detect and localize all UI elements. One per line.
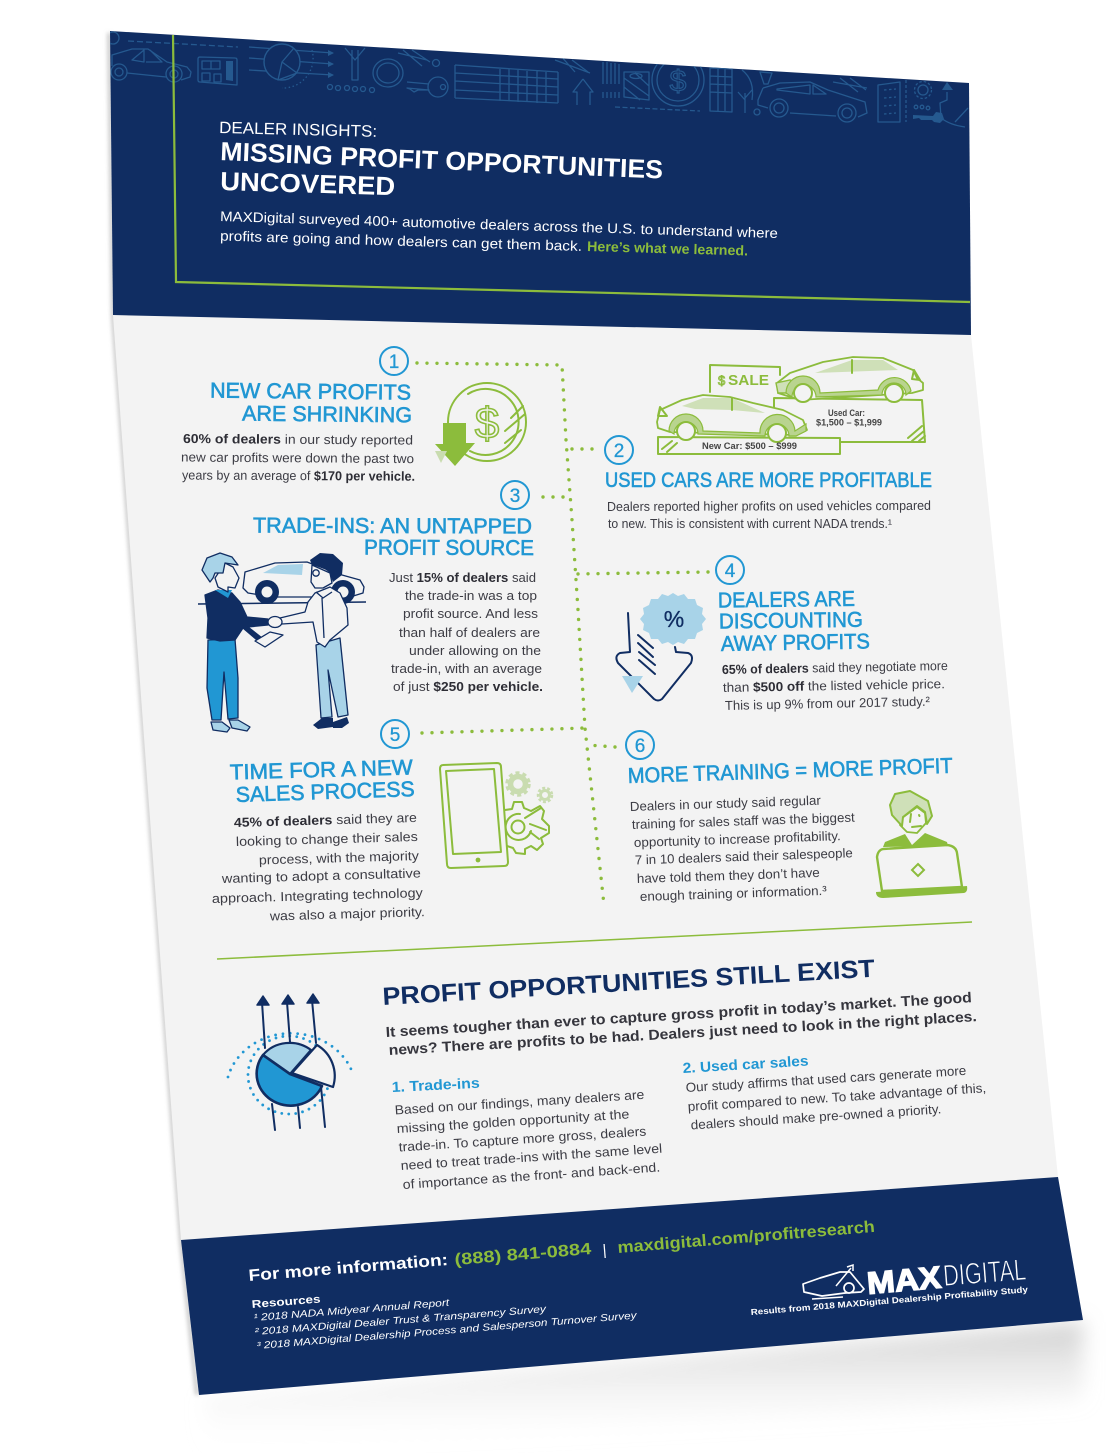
lead paragraph: It seems tougher than ever to capture gross profit in today’s market. The good: [385, 990, 972, 1041]
resources list: ² 2018 MAXDigital Dealer Trust & Transparency Survey: [254, 1304, 548, 1338]
heading 4: [718, 587, 870, 656]
column: trade-ins: trade-in. To capture more gross, dealers: [398, 1123, 647, 1154]
contact line: (888) 841-0884: [454, 1240, 593, 1269]
number badge 2: [605, 436, 633, 464]
column: used car sales: dealers should make pre-owned a priority.: [690, 1101, 942, 1132]
contact line: |: [602, 1242, 607, 1259]
heading 6: MORE TRAINING = MORE PROFIT: [627, 754, 953, 788]
header title: UNCOVERED: [220, 166, 396, 201]
section 5: sales process: [212, 720, 552, 924]
heading 4: DISCOUNTING: [719, 608, 863, 633]
column: used car sales: [682, 1054, 987, 1132]
body 5: process, with the majority: [259, 848, 420, 867]
body 3: than half of dealers are: [399, 625, 540, 640]
number badge 5: [381, 720, 409, 748]
lead paragraph: [385, 990, 977, 1059]
header intro: MAXDigital surveyed 400+ automotive dealers across the U.S. to understand where: [220, 208, 778, 241]
icon: person at laptop: [876, 791, 967, 898]
icon: tablet and gears: [440, 763, 552, 868]
sale sign: $: [718, 373, 726, 388]
section 1: new car profits: [181, 347, 526, 484]
body 1: new car profits were down the past two: [181, 450, 414, 466]
column: used car sales: 2. Used car sales: [682, 1054, 809, 1077]
icon: coin with down arrow: [435, 383, 526, 466]
left man: [202, 553, 268, 732]
contact line: [248, 1218, 875, 1285]
header icon pattern: $: [670, 65, 687, 98]
contact line: maxdigital.com/profitresearch: [617, 1218, 875, 1257]
body 1: years by an average of $170 per vehicle.: [182, 468, 415, 484]
body 1: 60% of dealers in our study reported: [183, 431, 413, 448]
body 4: than $500 off the listed vehicle price.: [723, 676, 945, 695]
resources list: [251, 1293, 638, 1352]
header intro: [220, 208, 778, 258]
price labels: New Car: $500 – $999: [702, 441, 797, 451]
price labels: Used Car:: [828, 408, 865, 418]
heading: profit opportunities still exist: PROFIT OPPORTUNITIES STILL EXIST: [382, 955, 876, 1011]
icon: pie chart with arrows: [228, 994, 351, 1130]
illustration: handshake with car: [198, 553, 366, 732]
heading 1: NEW CAR PROFITS: [210, 379, 411, 405]
section 6: training: [626, 731, 967, 904]
green frame line: [173, 35, 970, 302]
number badge 3: 3: [510, 486, 520, 507]
header title: MISSING PROFIT OPPORTUNITIES: [220, 136, 664, 185]
header intro: profits are going and how dealers can get them back.: [220, 228, 582, 254]
body 6: Dealers in our study said regular: [630, 793, 822, 814]
logo: MAX Digital: MAX: [866, 1260, 943, 1301]
right man: [280, 553, 349, 729]
number badge 3: [501, 481, 529, 509]
used car platform: [774, 398, 925, 442]
body 3: the trade-in was a top: [405, 588, 537, 603]
body 3: [389, 570, 543, 694]
column: trade-ins: missing the golden opportunity at the: [396, 1106, 630, 1136]
sale sign: SALE: [728, 372, 769, 389]
panel: header: [107, 31, 971, 335]
column: used car sales: profit compared to new. To take advantage of this,: [687, 1080, 987, 1114]
body 6: opportunity to increase profitability.: [634, 828, 841, 850]
resources list: ³ 2018 MAXDigital Dealership Process and Salesperson Turnover Survey: [256, 1310, 638, 1352]
logo: MAX Digital: [803, 1254, 1027, 1301]
body 4: [722, 658, 948, 713]
heading 3: PROFIT SOURCE: [364, 536, 534, 560]
heading 5: SALES PROCESS: [235, 777, 415, 807]
number badge 2: 2: [614, 441, 624, 462]
body 4: 65% of dealers said they negotiate more: [722, 658, 948, 677]
resources list: Resources: [251, 1293, 321, 1311]
column: trade-ins: [391, 1076, 663, 1192]
column: trade-ins: Based on our findings, many dealers are: [394, 1087, 645, 1117]
section 3: trade-ins: [198, 481, 543, 732]
number badge 4: [716, 556, 744, 584]
body 3: under allowing on the: [409, 643, 541, 658]
document: [255, 632, 283, 647]
sale sign: [710, 365, 780, 392]
body 2: to new. This is consistent with current NADA trends.¹: [608, 516, 893, 531]
logo: MAX Digital: DIGITAL: [942, 1254, 1027, 1293]
heading 5: [229, 755, 415, 807]
section: profit opportunities: [228, 955, 987, 1192]
body 3: profit source. And less: [403, 606, 539, 621]
panel: footer: [181, 1177, 1083, 1395]
column: trade-ins: need to treat trade-ins with the same level: [400, 1141, 663, 1173]
clasped hands: [268, 616, 282, 628]
body 5: looking to change their sales: [236, 829, 419, 849]
body 5: wanting to adopt a consultative: [221, 865, 421, 886]
body 2: [607, 498, 931, 531]
column: trade-ins: 1. Trade-ins: [391, 1076, 480, 1096]
heading 1: [210, 379, 412, 427]
body 2: Dealers reported higher profits on used vehicles compared: [607, 498, 931, 514]
body 3: trade-in, with an average: [391, 661, 542, 676]
heading 2: USED CARS ARE MORE PROFITABLE: [605, 468, 932, 492]
body 3: of just $250 per vehicle.: [393, 679, 543, 694]
column: trade-ins: of importance as the front- and back-end.: [402, 1159, 661, 1192]
heading 5: TIME FOR A NEW: [229, 755, 414, 784]
body 3: Just 15% of dealers said: [389, 570, 536, 585]
new car: [657, 395, 807, 442]
icon: cars on sale: [657, 357, 925, 454]
number badge 4: 4: [725, 561, 736, 582]
study note: Results from 2018 MAXDigital Dealership Profitability Study: [750, 1284, 1029, 1317]
dotted connector lines: [417, 363, 708, 905]
section 2: used cars: [605, 357, 932, 531]
divider: [217, 922, 972, 959]
body 5: was also a major priority.: [269, 904, 425, 924]
body 6: enough training or information.³: [640, 883, 828, 904]
price labels: $1,500 – $1,999: [816, 418, 882, 428]
header intro: Here’s what we learned.: [587, 238, 748, 258]
new car platform: [658, 437, 840, 454]
body 6: have told them they don’t have: [637, 865, 820, 886]
price labels: [702, 408, 882, 451]
icon: discount arrow: [616, 593, 706, 700]
body 5: 45% of dealers said they are: [234, 810, 417, 830]
body 1: [181, 431, 415, 484]
number badge 1: 1: [389, 352, 399, 373]
icon: coin with down arrow: $: [475, 399, 499, 448]
header icon pattern: [107, 32, 968, 127]
body 6: [630, 793, 855, 904]
number badge 6: 6: [635, 736, 645, 757]
body 5: [212, 810, 425, 924]
body 6: 7 in 10 dealers said their salespeople: [635, 845, 853, 867]
number badge 1: [380, 347, 408, 375]
column: used car sales: Our study affirms that used cars generate more: [685, 1063, 967, 1095]
resources list: ¹ 2018 NADA Midyear Annual Report: [253, 1298, 451, 1324]
heading 3: TRADE-INS: AN UNTAPPED: [253, 514, 532, 538]
icon: discount arrow: %: [664, 606, 684, 632]
header eyebrow: DEALER INSIGHTS:: [219, 119, 377, 141]
heading 3: [253, 514, 534, 560]
number badge 5: 5: [390, 725, 400, 746]
section 4: discounting: [616, 556, 948, 713]
number badge 6: [626, 731, 654, 759]
heading 1: ARE SHRINKING: [242, 402, 412, 427]
used car: [776, 357, 923, 402]
body 5: approach. Integrating technology: [212, 885, 424, 906]
body 6: training for sales staff was the biggest: [632, 810, 855, 832]
lead paragraph: news? There are profits to be had. Dealers just need to look in the right places.: [388, 1009, 977, 1059]
heading 4: AWAY PROFITS: [721, 629, 870, 656]
contact line: For more information:: [248, 1251, 449, 1285]
body 4: This is up 9% from our 2017 study.²: [725, 694, 931, 713]
heading 4: DEALERS ARE: [718, 587, 855, 612]
car: [243, 562, 364, 604]
